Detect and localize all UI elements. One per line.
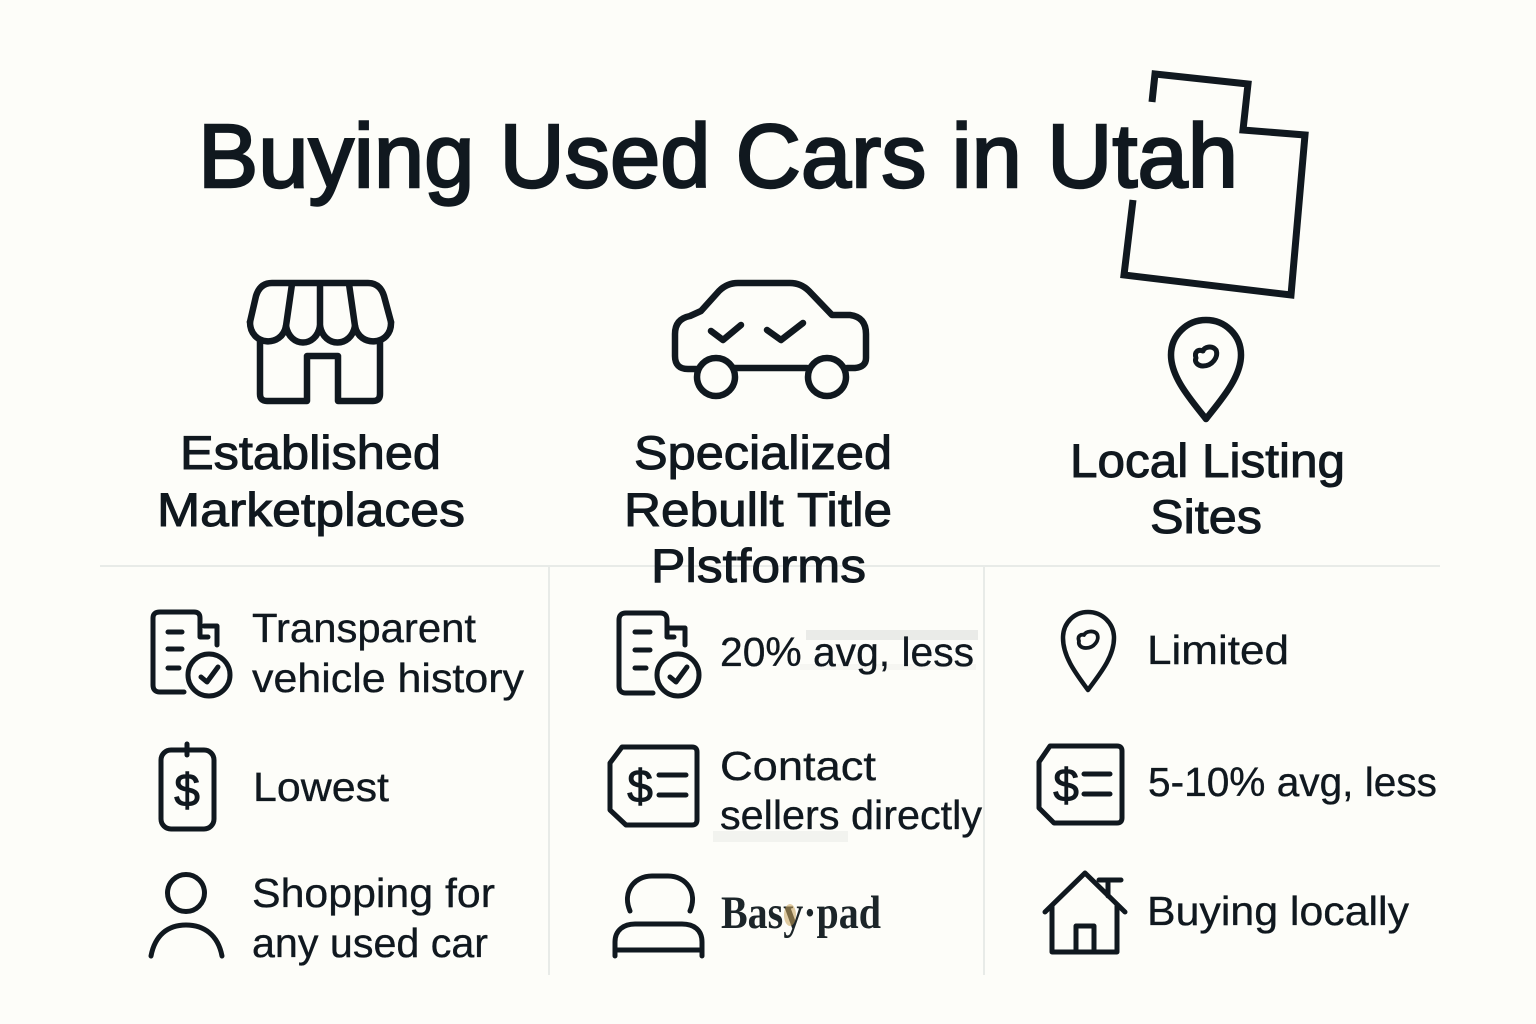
text [252,605,525,701]
icon: document check [619,613,699,696]
heading: established marketplaces [157,426,465,536]
item: contact sellers directly [610,743,983,838]
text [252,870,495,966]
item: 20% avg less [619,613,974,696]
icon: dollar ticket: $ [627,760,653,812]
icon: price tag [161,744,214,829]
panel: local listing sites [1039,320,1437,952]
heading: specialized rebuilt title platforms: Rebullt Title [624,483,892,536]
heading: local listing sites: Sites [1150,490,1262,543]
title: Buying Used Cars in Utah [198,107,1238,207]
icon: car with check marks [675,283,866,396]
text: Shopping for [252,870,495,916]
icon: document check [153,612,230,696]
heading: specialized rebuilt title platforms: Specialized [634,426,892,479]
text: Transparent [252,605,477,651]
item: shopping for any used car [151,870,495,966]
text: vehicle history [252,655,525,701]
icon: location pin [1063,612,1114,690]
text: sellers directly [720,792,983,838]
item: buying locally [1045,873,1410,952]
icon: Utah state outline [1124,74,1305,295]
text [720,743,983,838]
ghost text smudges [713,630,978,842]
text: Limited [1147,627,1289,673]
icon: price tag: $ [174,764,200,816]
icon: dollar ticket: $ [1053,759,1079,811]
heading: established marketplaces: Marketplaces [157,483,465,536]
text: any used car [252,920,488,966]
text: Buying locally [1147,888,1410,934]
icon: dollar ticket [610,747,697,825]
heading: established marketplaces: Established [180,426,441,479]
icon: person [151,874,222,956]
icon: house [1045,873,1125,952]
item: limited [1063,612,1289,690]
panel: established marketplaces [151,283,525,966]
panel: specialized rebuilt title platforms [610,283,983,956]
text: Basy·pad [721,887,881,939]
item: transparent vehicle history [153,605,525,701]
text: 20% avg, less [720,629,974,675]
item: basy pad [615,876,881,956]
icon: dollar ticket [1039,746,1122,823]
icon: storefront [250,283,391,401]
heading: specialized rebuilt title platforms: Plstforms [651,539,866,592]
text: Contact [720,743,877,789]
heading: specialized rebuilt title platforms [624,426,892,592]
icon: sofa [615,876,702,956]
text: 5-10% avg, less [1148,759,1437,805]
item: lowest [161,744,390,829]
heading: local listing sites: Local Listing [1070,434,1345,487]
heading: local listing sites [1070,434,1345,543]
icon: location pin [1171,320,1241,419]
text: Lowest [253,764,390,810]
item: 5-10% avg less [1039,746,1437,823]
